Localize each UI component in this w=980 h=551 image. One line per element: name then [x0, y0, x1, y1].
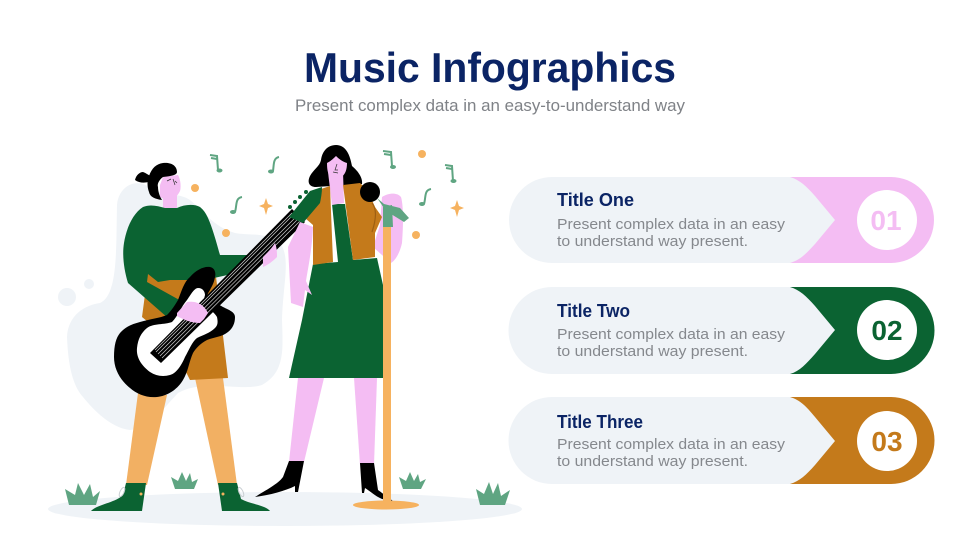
man: hands [177, 243, 277, 323]
woman: sleeve [289, 187, 322, 223]
woman: dress [289, 204, 384, 378]
ground ellipse [48, 492, 522, 526]
woman: arms [288, 194, 403, 307]
title: Music Infographics [304, 44, 676, 91]
heading: Title One [557, 190, 634, 210]
man: neck and head [135, 163, 181, 211]
blob dots [58, 279, 94, 306]
grass tufts [65, 472, 510, 505]
man: skirt [142, 268, 228, 380]
man: shoes [91, 483, 270, 511]
guitar neck [150, 209, 305, 363]
guitar [114, 209, 305, 397]
number: 03 [871, 426, 903, 457]
guitar tuning pegs [288, 190, 308, 209]
body text: Present complex data in an easy [557, 436, 786, 453]
number circle [857, 190, 917, 250]
arrow pill [508, 397, 835, 484]
sparkles and dots [191, 150, 464, 239]
man: sweater [123, 205, 247, 318]
badge background [780, 397, 935, 484]
badge background [780, 287, 935, 374]
body text: to understand way present. [557, 233, 748, 250]
heading: Title Two [557, 301, 630, 321]
badge background [780, 177, 934, 263]
music notes [210, 151, 453, 212]
illustration: musicians [48, 145, 522, 526]
body text: Present complex data in an easy [557, 326, 786, 343]
heading: Title Three [557, 412, 643, 432]
panel: title three [508, 397, 935, 484]
woman: hair [309, 145, 362, 187]
man: legs [126, 378, 237, 485]
number circle [857, 411, 917, 471]
number circle [857, 300, 917, 360]
background blob [67, 183, 286, 430]
arrow pill [508, 287, 835, 374]
woman: vest [305, 183, 382, 265]
woman: neck and face [327, 156, 347, 205]
arrow pill [509, 177, 835, 263]
panel: title one [509, 177, 934, 263]
microphone stand [353, 182, 419, 510]
number: 02 [871, 315, 903, 346]
subtitle: Present complex data in an easy-to-understand way [295, 96, 685, 115]
body text: Present complex data in an easy [557, 216, 786, 233]
woman: boots [255, 461, 393, 501]
body text: to understand way present. [557, 343, 748, 360]
number: 01 [870, 205, 902, 236]
woman: legs [289, 378, 377, 465]
panel: title two [508, 287, 935, 374]
body text: to understand way present. [557, 453, 748, 470]
